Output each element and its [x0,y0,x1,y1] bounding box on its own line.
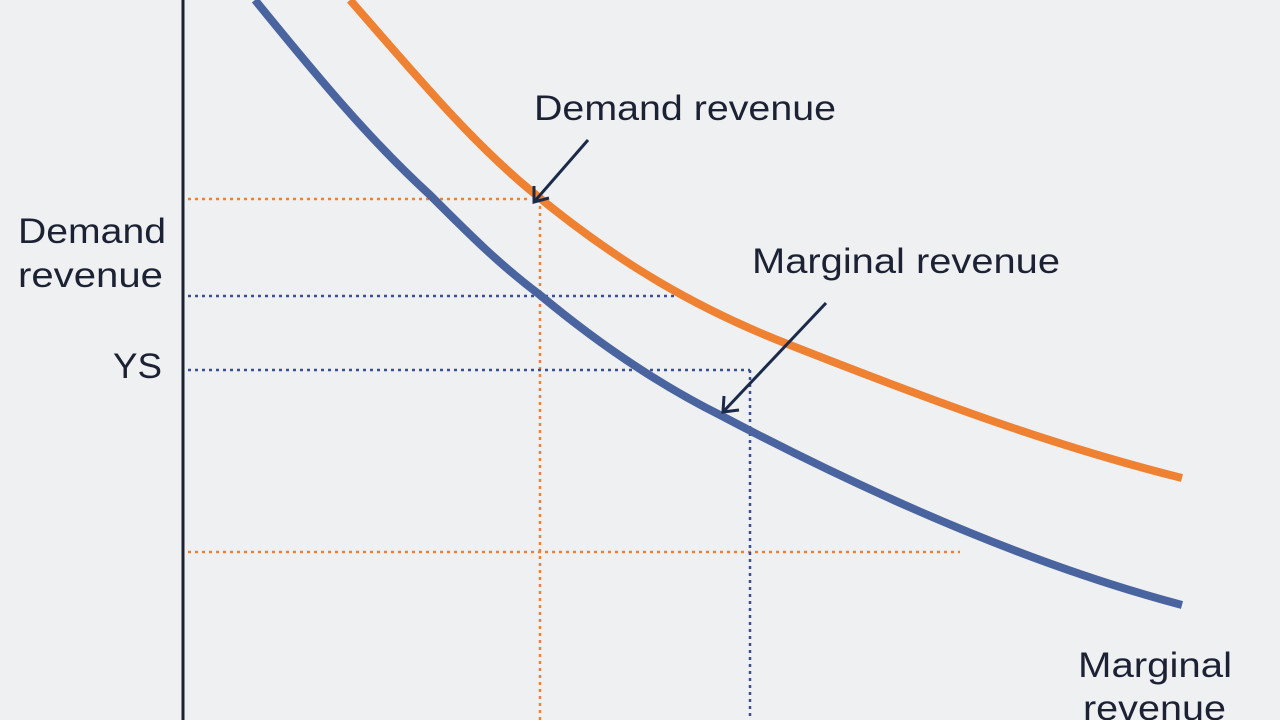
curve end label [1078,646,1232,720]
curve: marginal revenue [255,0,1182,605]
label: YS: YS [113,347,162,386]
y axis label: revenue [18,256,163,295]
guide lines [188,199,960,720]
y axis [182,0,184,720]
label: demand revenue: Demand revenue [534,89,836,128]
arrow: marginal revenue [723,303,826,412]
curve: demand revenue [350,0,1182,478]
y axis label: Demand [18,212,166,251]
arrow: demand revenue [534,140,588,202]
curve end label: Marginal [1078,646,1232,685]
y axis label [18,212,166,295]
label: marginal revenue: Marginal revenue [752,242,1060,281]
